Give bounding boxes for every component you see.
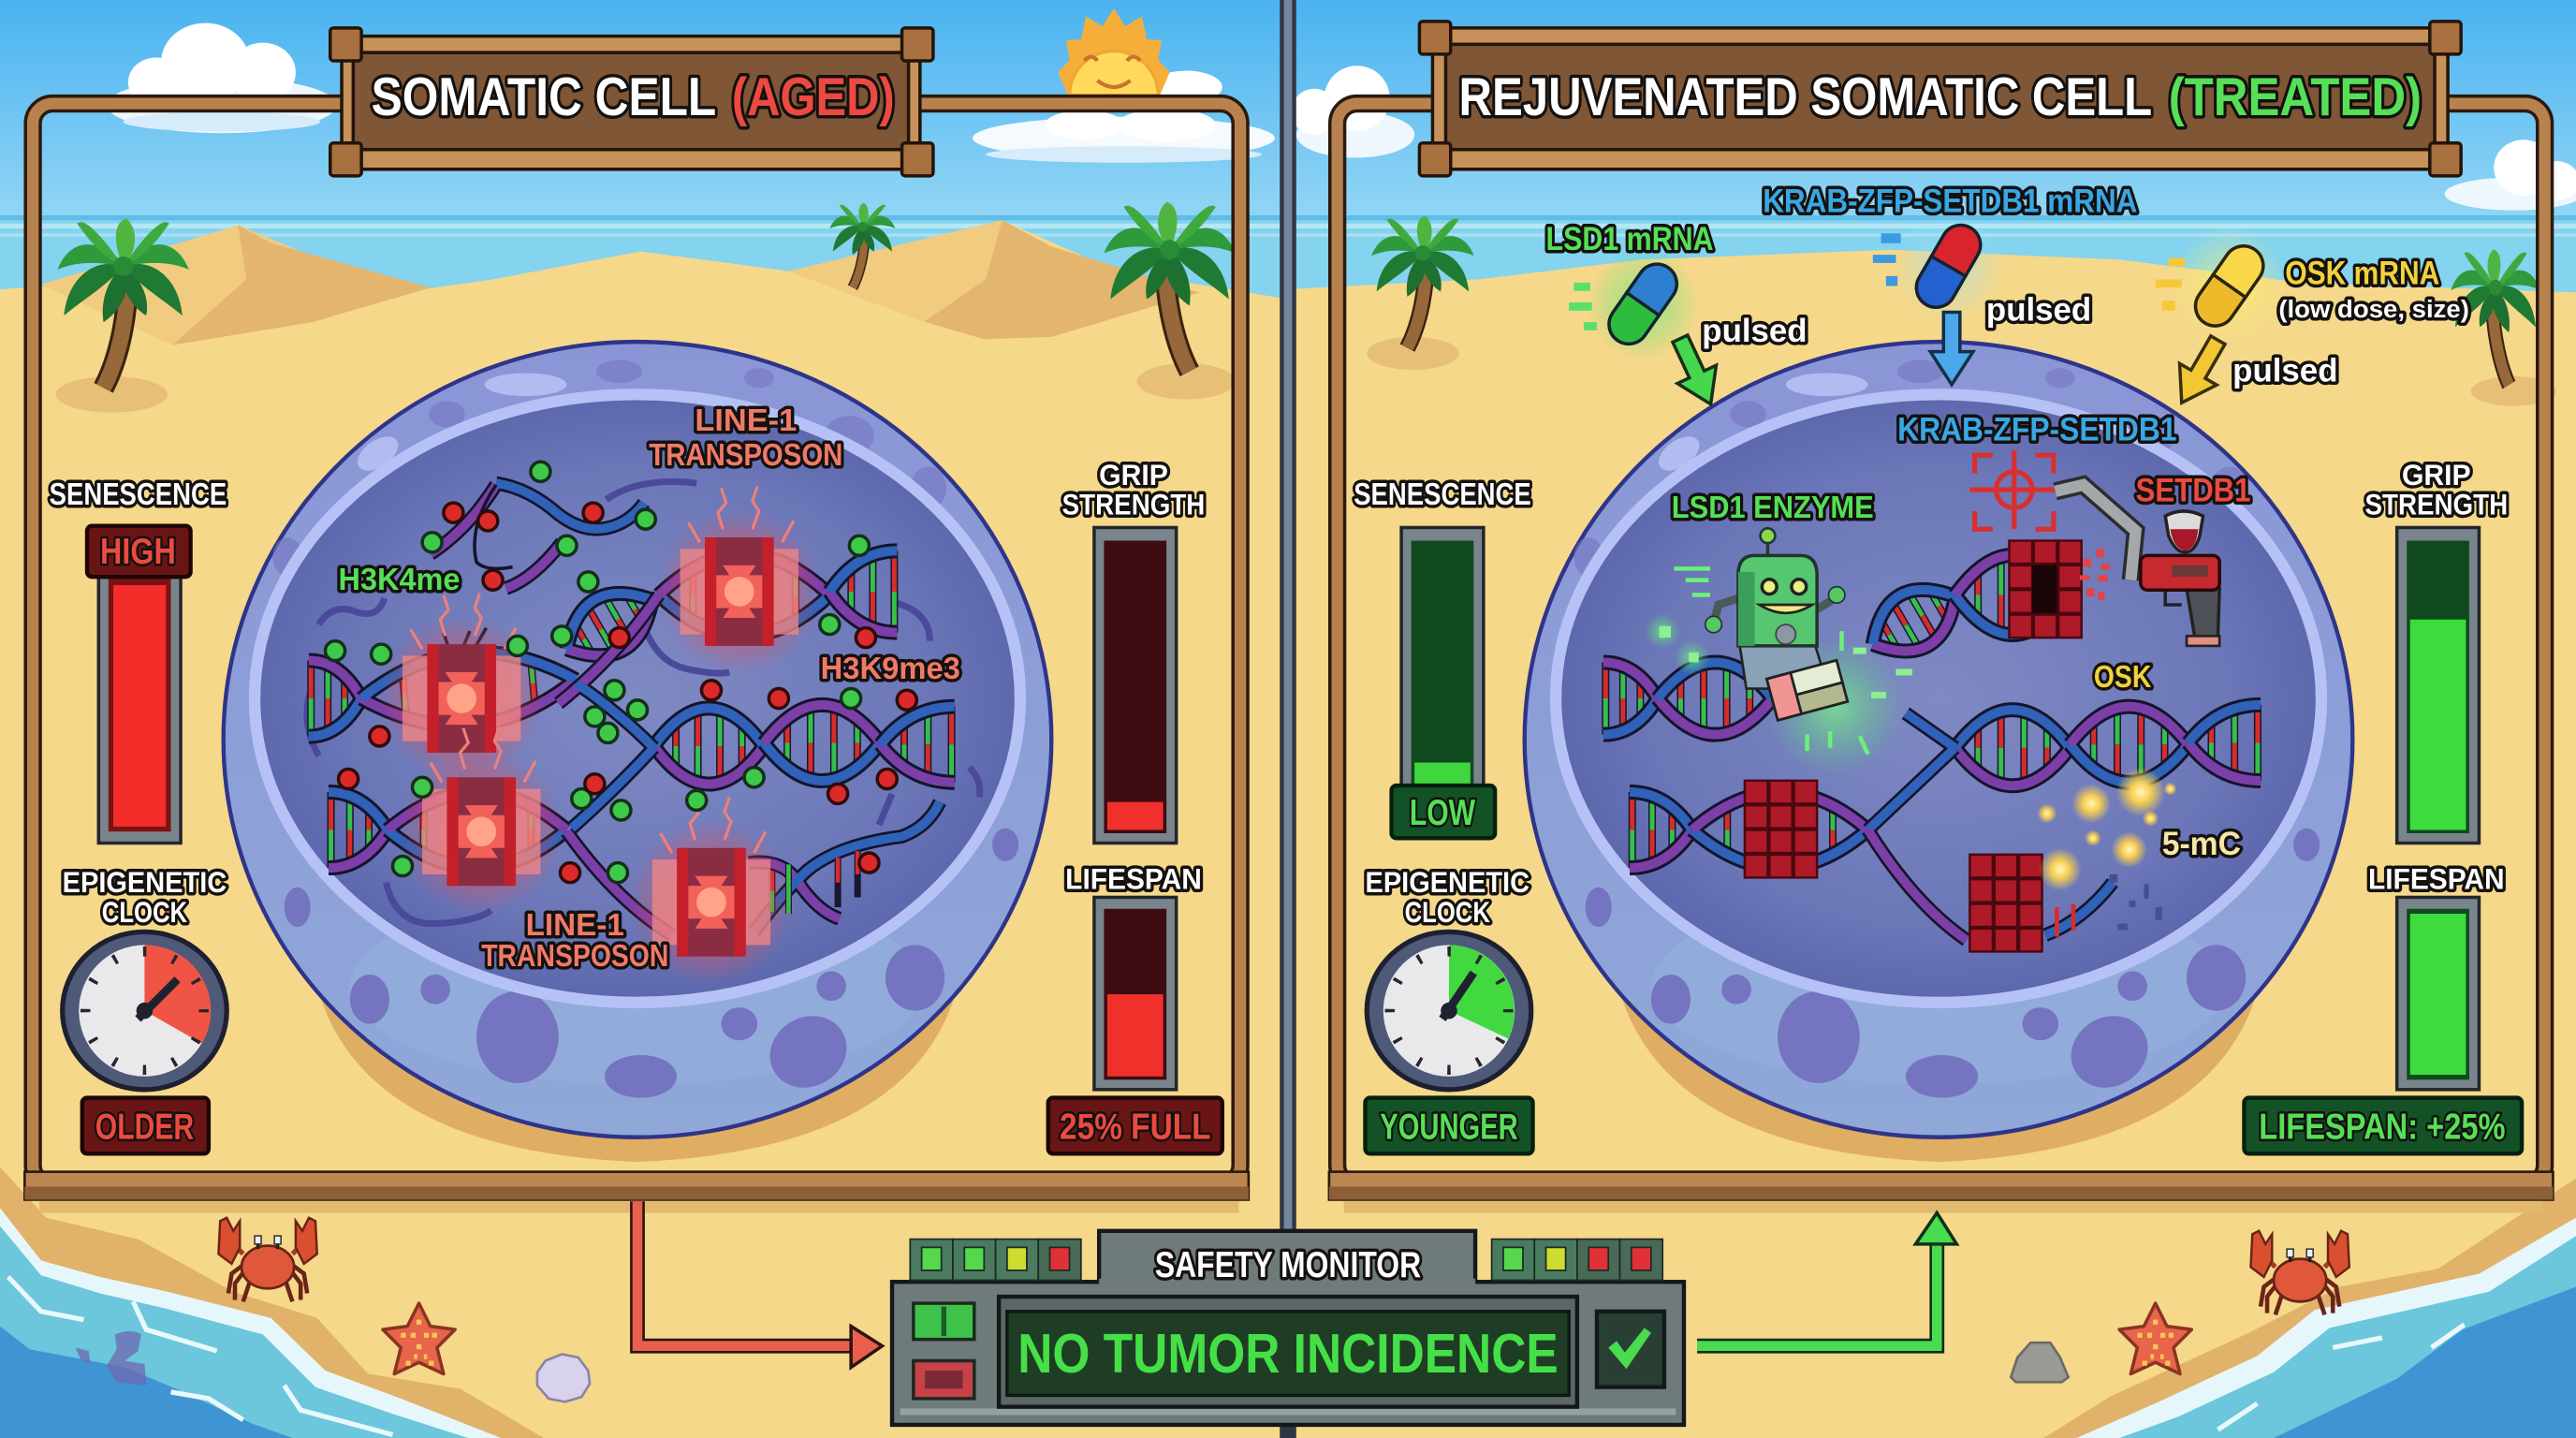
label: LINE-1 transposon bottom: LINE-1 — [526, 908, 624, 943]
screen: no tumor incidence: NO TUMOR INCIDENCE — [1017, 1322, 1559, 1385]
lifespan gauge: aged — [1065, 862, 1202, 1090]
histone marks red — [339, 503, 916, 883]
title board: treated — [1419, 22, 2461, 176]
label: older: OLDER — [95, 1108, 194, 1148]
screen: no tumor incidence — [999, 1297, 1577, 1407]
beach: crab right — [2250, 1231, 2349, 1314]
lifespan gauge: aged: LIFESPAN — [1065, 862, 1202, 896]
beach: crab left — [218, 1218, 317, 1301]
stray chromatin strands — [307, 482, 980, 924]
sky — [0, 0, 2576, 222]
label: H3K4me: H3K4me — [339, 563, 460, 597]
epigenetic clock: aged — [63, 865, 227, 1090]
arrow: KRAB pulsed — [1930, 313, 1973, 385]
grip gauge: aged — [1062, 458, 1205, 844]
label: OSK mRNA — [2278, 256, 2469, 323]
right ocean — [2043, 1179, 2576, 1438]
beach: starfish right — [2119, 1303, 2191, 1374]
label: SETDB1: SETDB1 — [2136, 472, 2250, 508]
safety monitor — [892, 1231, 1684, 1425]
panel: treated frame — [1329, 104, 2553, 1199]
label: OSK mRNA: OSK mRNA — [2285, 256, 2439, 292]
arrow: red flow into monitor — [637, 1201, 882, 1368]
label: pulsed 3: pulsed — [2232, 352, 2338, 389]
label: pulsed 1: pulsed — [1702, 313, 1808, 349]
senescence gauge: treated — [1354, 477, 1531, 838]
icon: robot arm and gun — [2056, 485, 2219, 646]
label: 5-mC: 5-mC — [2162, 826, 2241, 862]
epigenetic clock: aged: EPIGENETIC — [63, 865, 227, 899]
panel: treated cell — [1525, 342, 2352, 1137]
icon: target reticle — [1969, 450, 2056, 529]
label: older — [82, 1098, 209, 1153]
label: younger: YOUNGER — [1380, 1108, 1518, 1148]
label: younger — [1365, 1098, 1533, 1153]
DNA with LINE-1 transposons — [309, 483, 955, 985]
DNA strands — [1603, 555, 2261, 940]
cell shadows — [317, 855, 2259, 1162]
label: OSK: OSK — [2094, 660, 2151, 695]
divider — [1280, 0, 1296, 1438]
title board: treated: REJUVENATED SOMATIC CELL — [1459, 67, 2152, 127]
label: LINE-1 transposon top: LINE-1 — [695, 404, 797, 438]
lifespan gauge: treated: LIFESPAN — [2368, 862, 2505, 896]
label: KRAB-ZFP-SETDB1: KRAB-ZFP-SETDB1 — [1897, 411, 2177, 448]
panel: aged cell — [224, 342, 1051, 1137]
beach: shell — [537, 1354, 590, 1401]
histone marks green — [326, 462, 869, 883]
icon: 5-mC sparks — [2037, 768, 2177, 890]
epigenetic clock: treated: EPIGENETIC — [1365, 865, 1530, 899]
label: LINE-1 transposon bottom — [481, 908, 668, 974]
sun — [1058, 8, 1170, 95]
title board: aged: (AGED) — [732, 67, 895, 127]
epigenetic clock: treated — [1365, 865, 1531, 1090]
sea horizon — [0, 215, 2576, 314]
label: lifespan +25% — [2244, 1098, 2522, 1153]
status buttons — [914, 1303, 974, 1399]
lifespan gauge: treated — [2368, 862, 2505, 1090]
senescence gauge: aged — [50, 477, 227, 844]
label: 25% full — [1048, 1098, 1222, 1153]
grip gauge: treated: STRENGTH — [2364, 487, 2508, 521]
arrow: OSK pulsed — [2163, 330, 2236, 414]
epigenetic clock: treated: CLOCK — [1405, 895, 1490, 929]
label: lifespan +25%: LIFESPAN: +25% — [2259, 1108, 2506, 1148]
icon: check mark — [1597, 1312, 1664, 1387]
heading: safety monitor: SAFETY MONITOR — [1155, 1245, 1421, 1285]
heterochromatin blocks — [1745, 541, 2082, 951]
icon: LSD1 eraser robot — [1645, 528, 1912, 776]
arrow: LSD1 pulsed — [1661, 330, 1730, 413]
label: LSD1 mRNA: LSD1 mRNA — [1546, 221, 1714, 257]
title board: aged: SOMATIC CELL — [372, 67, 716, 127]
LED row right — [1492, 1240, 1662, 1280]
label: H3K9me3: H3K9me3 — [821, 652, 960, 686]
arrow: green flow out of monitor — [1697, 1213, 1956, 1346]
icon: KRAB mRNA pill — [1873, 211, 2004, 322]
grip gauge: aged: STRENGTH — [1062, 487, 1205, 521]
grip gauge: treated — [2364, 458, 2508, 844]
title board: treated: (TREATED) — [2169, 67, 2422, 127]
frame ground shadows — [39, 1201, 2543, 1213]
epigenetic clock: aged: CLOCK — [102, 895, 187, 929]
LED row left — [910, 1240, 1081, 1280]
beach: starfish left — [383, 1303, 455, 1374]
label: KRAB-ZFP-SETDB1 mRNA: KRAB-ZFP-SETDB1 mRNA — [1763, 183, 2137, 219]
label: LSD1 enzyme: LSD1 ENZYME — [1672, 491, 1874, 525]
beach: rock — [2011, 1343, 2069, 1382]
icon: OSK mRNA pill — [2156, 227, 2289, 345]
title board: aged — [330, 28, 933, 176]
label: pulsed 2: pulsed — [1986, 291, 2091, 328]
label: 25% full: 25% FULL — [1060, 1108, 1211, 1148]
senescence gauge: treated: LOW — [1410, 793, 1476, 833]
grip gauge: aged: GRIP — [1099, 458, 1168, 492]
senescence gauge: treated: SENESCENCE — [1354, 477, 1531, 512]
label: LINE-1 transposon top — [649, 404, 842, 473]
label: LINE-1 transposon bottom: TRANSPOSON — [481, 939, 668, 974]
icon: LSD1 mRNA pill — [1569, 248, 1699, 360]
senescence gauge: aged: SENESCENCE — [50, 477, 227, 512]
label: OSK mRNA: (low dose, size) — [2278, 295, 2469, 323]
grip gauge: treated: GRIP — [2402, 458, 2471, 492]
label: LINE-1 transposon top: TRANSPOSON — [649, 438, 842, 473]
senescence gauge: aged: HIGH — [100, 532, 176, 572]
palm trees — [56, 202, 2556, 413]
left ocean — [0, 1167, 544, 1438]
clouds — [107, 23, 2576, 211]
panel: aged frame — [24, 104, 1249, 1199]
